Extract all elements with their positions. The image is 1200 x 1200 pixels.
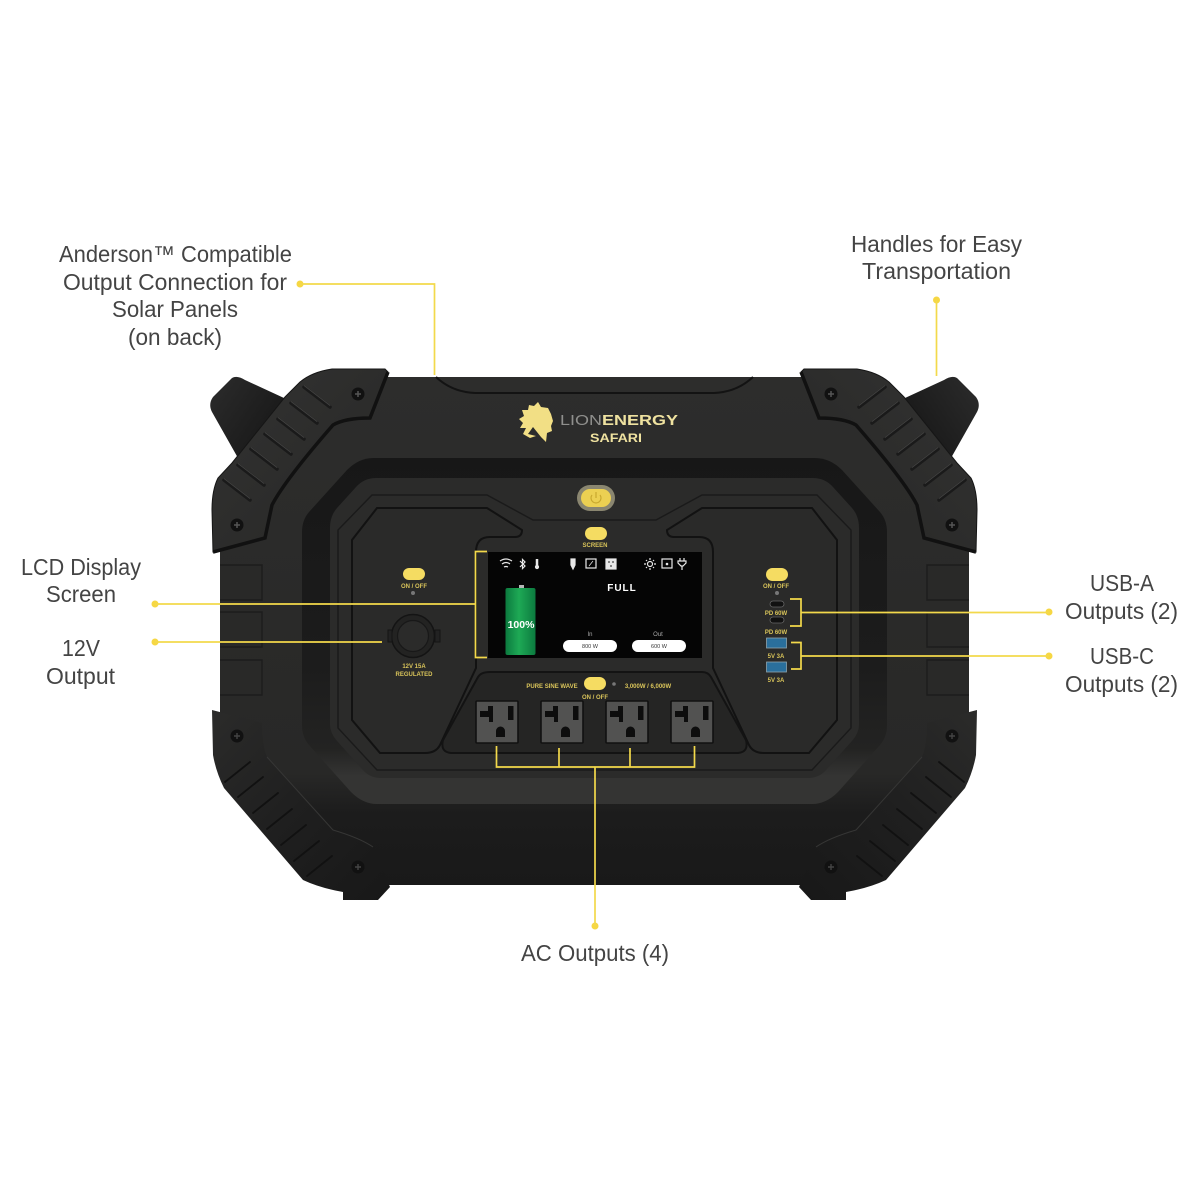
screen button xyxy=(582,527,608,549)
status icons xyxy=(500,558,686,570)
input reading: 800 W xyxy=(582,644,599,650)
top recess line xyxy=(436,377,753,393)
status text: FULL xyxy=(607,583,637,594)
right on/off and USB ports xyxy=(763,568,789,684)
right handle xyxy=(889,377,979,458)
label: Anderson output: Output Connection for xyxy=(63,269,287,295)
leader: USB-C xyxy=(791,642,1052,669)
corner guard top left xyxy=(212,369,388,552)
upper panel contour xyxy=(338,495,851,770)
label: handles: Transportation xyxy=(862,258,1011,284)
12V socket xyxy=(388,614,440,678)
right on/off and USB ports: ON / OFF xyxy=(763,584,789,590)
label: USB-C outputs xyxy=(1065,643,1178,697)
battery: 100% xyxy=(508,619,535,631)
leader: LCD xyxy=(152,552,487,658)
left panel inset xyxy=(352,508,522,753)
12V socket: 12V 15A xyxy=(402,664,426,670)
right on/off and USB ports: 5V 3A xyxy=(768,678,785,684)
inverter controls: 3,000W / 6,000W xyxy=(625,684,672,690)
label: LCD display: LCD Display xyxy=(21,554,141,580)
label: USB-C outputs: Outputs (2) xyxy=(1065,671,1178,697)
output reading: 600 W xyxy=(651,644,668,650)
label: Anderson output: Solar Panels xyxy=(112,296,238,322)
product name: SAFARI xyxy=(590,431,642,445)
main housing xyxy=(220,377,969,885)
label: handles: Handles for Easy xyxy=(851,231,1022,257)
right on/off and USB ports: PD 60W xyxy=(765,611,788,617)
output reading: Out xyxy=(653,632,663,638)
left on/off button: ON / OFF xyxy=(401,584,427,590)
inverter controls: ON / OFF xyxy=(582,695,608,701)
label: AC outputs: AC Outputs (4) xyxy=(521,940,669,966)
label: handles xyxy=(851,231,1022,284)
AC outlets xyxy=(476,701,713,743)
label: LCD display: Screen xyxy=(46,581,116,607)
left on/off button xyxy=(401,568,427,595)
label: 12V output xyxy=(46,635,116,689)
12V socket: REGULATED xyxy=(396,672,433,678)
label: 12V output: 12V xyxy=(62,635,101,661)
label: USB-C outputs: USB-C xyxy=(1090,643,1154,669)
label: Anderson output: Anderson™ Compatible xyxy=(59,241,292,267)
side notches left xyxy=(220,565,262,695)
LCD screen xyxy=(488,552,702,658)
right panel inset xyxy=(667,508,837,753)
logo xyxy=(519,402,678,445)
device: Lion Energy Safari power station xyxy=(210,369,979,900)
inverter controls: PURE SINE WAVE xyxy=(526,684,578,690)
leader: handles xyxy=(933,296,940,376)
corner guard bottom right xyxy=(799,710,977,900)
wordmark: LION ENERGY xyxy=(560,413,678,429)
leader: 12V xyxy=(152,638,382,646)
inverter controls xyxy=(526,677,672,701)
output reading xyxy=(632,632,686,652)
leader: USB-A xyxy=(790,599,1052,626)
label: USB-A outputs: USB-A xyxy=(1090,570,1155,596)
callout lines xyxy=(152,280,1052,930)
label: USB-A outputs xyxy=(1065,570,1178,624)
label: USB-A outputs: Outputs (2) xyxy=(1065,598,1178,624)
icon: lion head xyxy=(519,402,553,442)
input reading xyxy=(563,632,617,652)
label: Anderson output xyxy=(59,241,292,350)
right on/off and USB ports: PD 60W xyxy=(765,630,788,636)
front panel xyxy=(330,478,859,778)
left handle xyxy=(210,377,300,458)
leader: Anderson xyxy=(296,280,434,375)
recessed front frame xyxy=(302,458,887,804)
power button xyxy=(577,485,615,511)
outlet panel xyxy=(442,672,747,753)
corner guard top right xyxy=(801,369,977,552)
battery xyxy=(506,585,536,655)
label: 12V output: Output xyxy=(46,663,116,689)
input reading: In xyxy=(587,632,593,638)
screen button: SCREEN xyxy=(582,543,608,549)
corner guard bottom left xyxy=(212,710,390,900)
label: LCD display xyxy=(21,554,141,607)
leader: AC outputs xyxy=(496,746,694,930)
right on/off and USB ports: 5V 3A xyxy=(768,654,785,660)
side notches right xyxy=(927,565,969,695)
label: Anderson output: (on back) xyxy=(128,324,222,350)
